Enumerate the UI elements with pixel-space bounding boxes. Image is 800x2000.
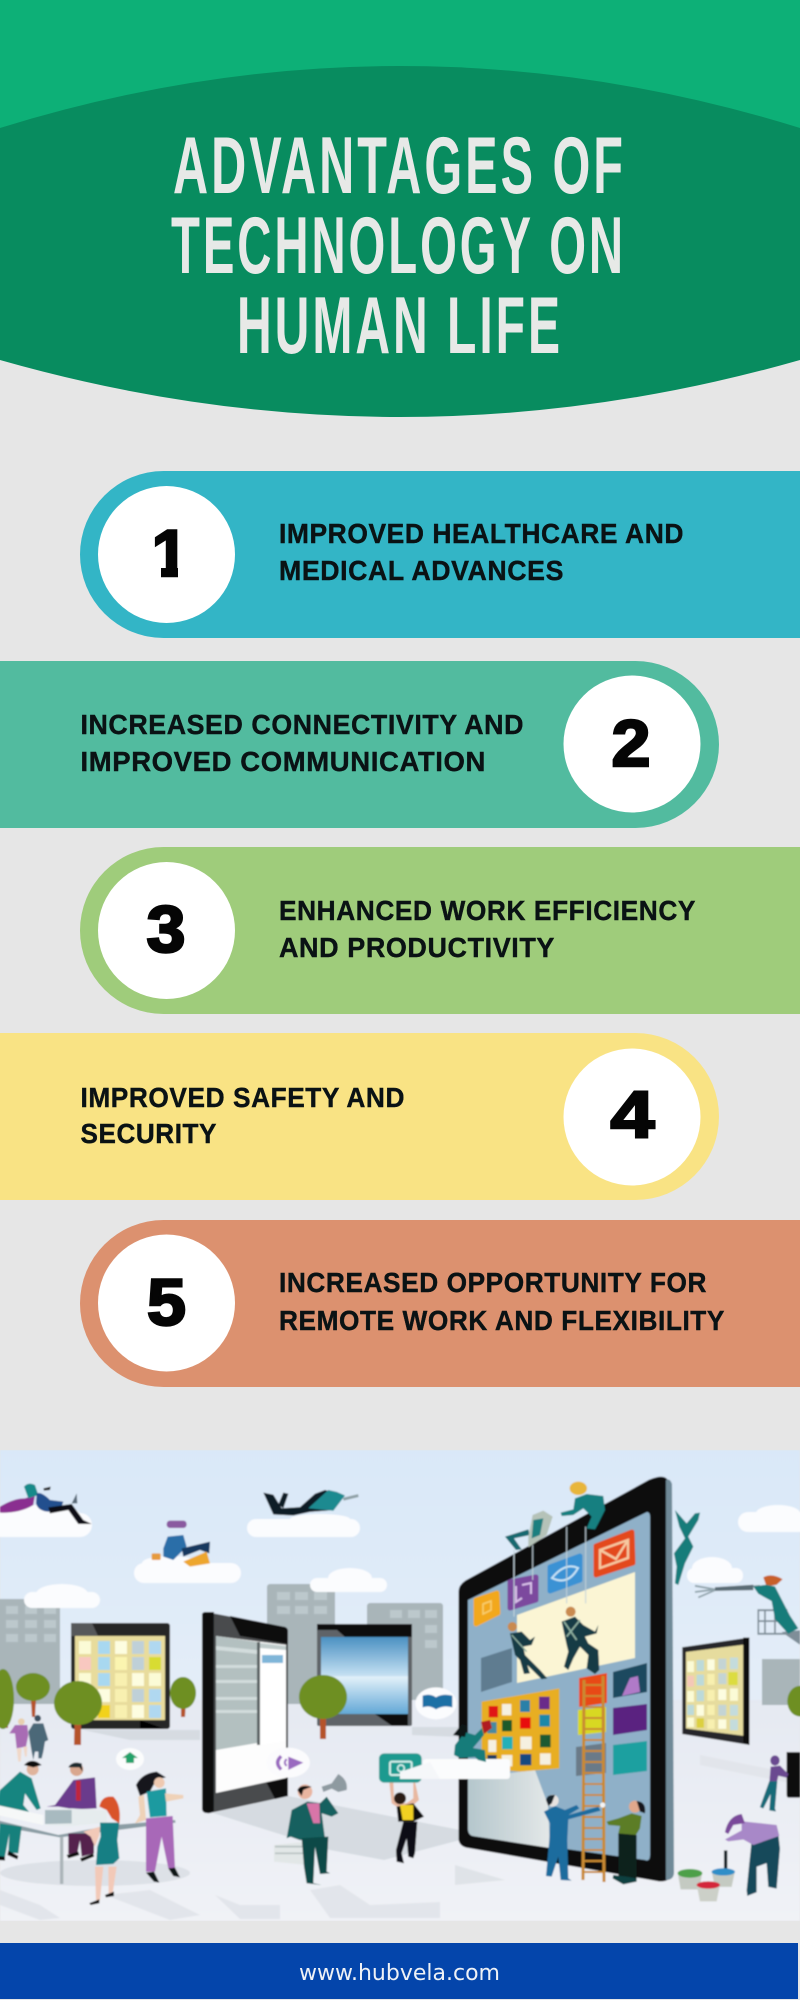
icon: trees [0, 1669, 347, 1745]
blonde man leaning [561, 1482, 605, 1529]
climber on tablet side [674, 1510, 700, 1585]
header top band [0, 0, 800, 200]
man in green [607, 1801, 645, 1884]
figure: woman with tablet at right edge [760, 1686, 800, 1811]
app icon: envelope [596, 1532, 633, 1575]
table [0, 1820, 176, 1884]
panel: item 3: ENHANCED WORK EFFICIENCY [279, 895, 696, 926]
header dark green ellipse [0, 66, 800, 417]
ropes [514, 1527, 586, 1617]
app icon: blue [550, 1556, 580, 1591]
ladder [583, 1676, 604, 1882]
panel: item 5: REMOTE WORK AND FLEXIBILITY [279, 1305, 725, 1336]
floor shadows [0, 1727, 800, 1920]
figures: couple walking [9, 1715, 48, 1762]
panel: item 3 [80, 847, 800, 1014]
tablet screen [468, 1512, 650, 1860]
clouds [0, 1505, 800, 1608]
illustration: people building a digital city [0, 1450, 800, 1921]
panel: item 5 [80, 1220, 800, 1387]
woman lying on cloud [0, 1495, 35, 1513]
footer bar [0, 1943, 798, 1999]
figures: team around table [0, 1761, 183, 1905]
panel: item 5: INCREASED OPPORTUNITY FOR [279, 1267, 707, 1298]
panel: item 1 [80, 471, 800, 638]
figures: men on top of tablet [505, 1482, 700, 1679]
icon: small tablet right [682, 1637, 749, 1745]
flying man with tool [263, 1490, 358, 1516]
colour tiles [576, 1663, 647, 1776]
cream panel [517, 1572, 635, 1683]
title: HUMAN LIFE [237, 281, 563, 371]
panel: item 2: IMPROVED COMMUNICATION [80, 746, 486, 777]
figure: man on cloud at calendar [400, 1720, 510, 1779]
figures: men at ladder [544, 1795, 645, 1884]
app icon: orange [476, 1593, 498, 1624]
title [171, 121, 626, 371]
panel: item 3: 3 [146, 892, 186, 966]
woman with red hair [83, 1796, 120, 1905]
background buildings [0, 1584, 800, 1705]
panel: item 1: IMPROVED HEALTHCARE AND [279, 518, 684, 549]
papers and box on table [0, 1804, 82, 1825]
app icon: purple [510, 1577, 536, 1608]
abseiling man upper [562, 1607, 599, 1674]
projector beam [468, 1770, 550, 1848]
man in blue [544, 1795, 605, 1881]
panel: item 4: SECURITY [80, 1118, 217, 1149]
slate square [481, 1648, 512, 1692]
website url: www.hubvela.com [299, 1961, 500, 1986]
figure: girl holding camera sign [379, 1753, 424, 1863]
panel: item 1: MEDICAL ADVANCES [279, 555, 564, 586]
man with laptop on cloud [36, 1493, 63, 1512]
calendar grid [482, 1688, 559, 1772]
figures on clouds [0, 1484, 210, 1567]
panel: item 4 [0, 1033, 719, 1200]
icon: book bubble [415, 1687, 457, 1719]
paint buckets [678, 1868, 735, 1901]
seated man with rope [505, 1511, 553, 1550]
man in teal [0, 1761, 42, 1861]
person with box on cloud [167, 1521, 187, 1528]
man in purple [47, 1763, 97, 1862]
panel: item 4: IMPROVED SAFETY AND [80, 1082, 405, 1113]
panel: item 2 [0, 661, 719, 828]
header panel [0, 0, 800, 417]
figure: man with megaphone [274, 1774, 347, 1885]
abseiling man lower [508, 1622, 547, 1679]
woman in purple trousers [135, 1772, 183, 1883]
icon: landscape screen [317, 1624, 412, 1726]
figure: woman with spray lance and platform [695, 1575, 800, 1645]
icon: speaker bubble [275, 1746, 310, 1779]
panel: item 3: AND PRODUCTIVITY [279, 932, 555, 963]
panel: item 1: 1 [152, 516, 188, 590]
panel: item 2: INCREASED CONNECTIVITY AND [80, 709, 524, 740]
icon: laptop tablet with calendar grid [71, 1623, 170, 1729]
icon: giant tablet [460, 1478, 674, 1880]
panel: item 4: 4 [610, 1077, 655, 1151]
icon: portrait tablet with document [202, 1612, 288, 1813]
icon: green arrow bubble [116, 1748, 144, 1770]
panel: item 2: 2 [612, 706, 650, 780]
figure: painter with buckets [678, 1814, 780, 1901]
panel: item 5: 5 [147, 1265, 186, 1339]
